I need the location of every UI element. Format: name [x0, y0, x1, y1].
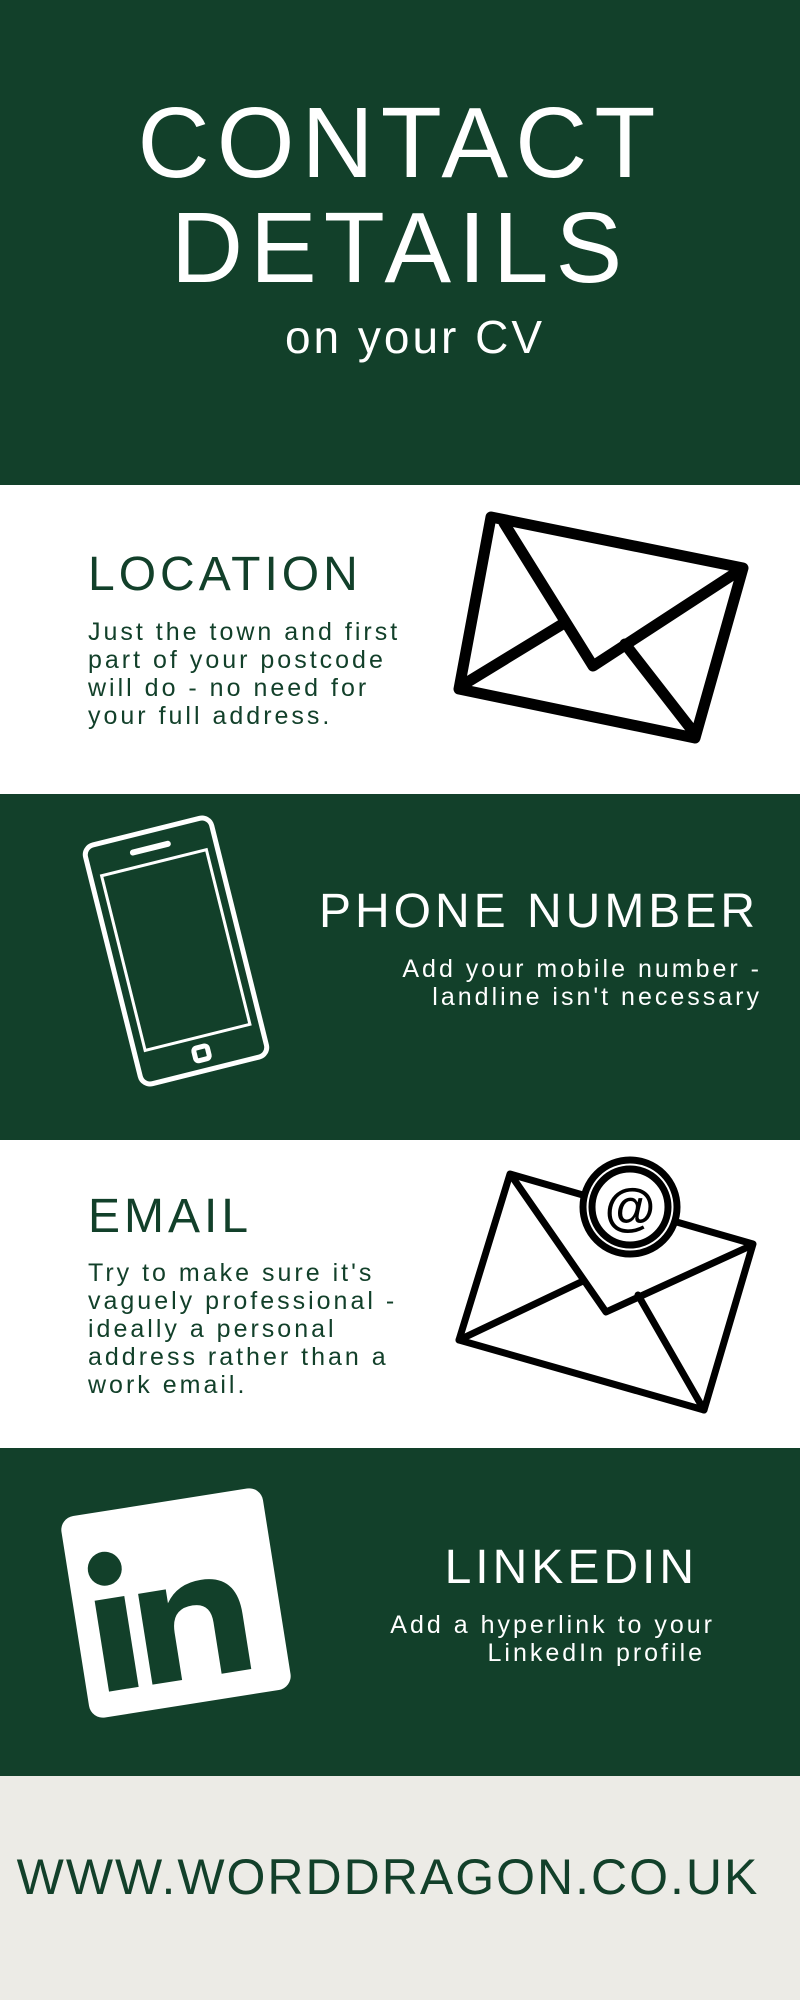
- title line 2: DETAILS: [171, 192, 629, 304]
- location text: Just the town and first: [88, 618, 400, 646]
- panel: location: [0, 485, 800, 794]
- email heading: EMAIL: [88, 1190, 252, 1243]
- footer url: WWW.WORDDRAGON.CO.UK: [17, 1849, 759, 1905]
- icon: linkedin: [59, 1486, 293, 1720]
- email text: address rather than a: [88, 1343, 389, 1371]
- panel: phone: [0, 794, 800, 1140]
- panel: linkedin: [0, 1448, 800, 1776]
- email text: ideally a personal: [88, 1315, 337, 1343]
- subtitle: on your CV: [285, 311, 545, 363]
- icon: envelope: [459, 517, 743, 738]
- panel: footer: [0, 1776, 800, 2000]
- email text: [88, 1259, 397, 1399]
- phone text: Add your mobile number -: [402, 955, 762, 983]
- linkedin heading: LINKEDIN: [445, 1541, 698, 1594]
- location text: will do - no need for: [88, 674, 369, 702]
- email text: Try to make sure it's: [88, 1259, 374, 1287]
- linkedin text: LinkedIn profile: [487, 1639, 705, 1667]
- location text: [88, 618, 400, 730]
- location text: part of your postcode: [88, 646, 386, 674]
- title: CONTACT: [138, 87, 662, 199]
- location text: your full address.: [88, 702, 332, 730]
- phone text: landline isn't necessary: [432, 983, 762, 1011]
- email text: vaguely professional -: [88, 1287, 397, 1315]
- phone heading: PHONE NUMBER: [319, 885, 759, 938]
- linkedin text: [390, 1611, 715, 1667]
- panel: email: [0, 1140, 800, 1448]
- linkedin text: Add a hyperlink to your: [390, 1611, 715, 1639]
- icon: email envelope with at sign: @: [605, 1179, 655, 1237]
- location heading: LOCATION: [88, 548, 362, 601]
- header panel: [0, 0, 800, 485]
- icon: email envelope with at sign: [459, 1160, 753, 1410]
- email text: work email.: [88, 1371, 247, 1399]
- icon: phone: [83, 816, 269, 1086]
- phone text: [402, 955, 762, 1011]
